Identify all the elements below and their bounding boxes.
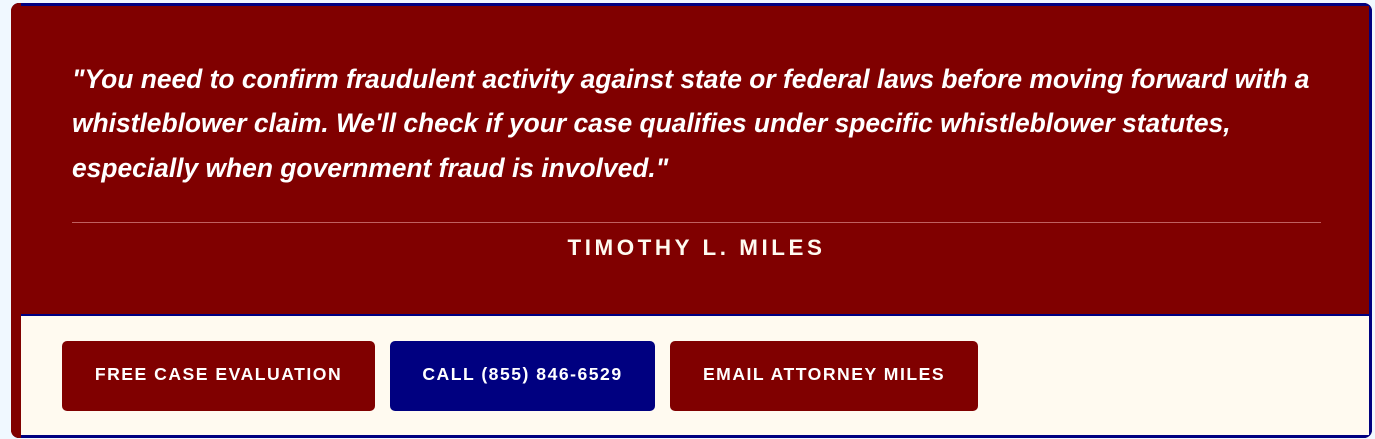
quote text: especially when government fraud is involved." [72,153,668,183]
button: email [670,341,978,411]
button: free case evaluation [62,341,375,411]
quote text: "You need to confirm fraudulent activity against state or federal laws before moving forward with a [72,64,1309,94]
quote text: whistleblower claim. We'll check if your case qualifies under specific whistleblower statutes, [72,108,1231,138]
button: email: EMAIL ATTORNEY MILES [703,364,945,384]
button: call [390,341,655,411]
quote text [72,64,1309,183]
attribution: TIMOTHY L. MILES [567,235,826,260]
button: free case evaluation: FREE CASE EVALUATION [95,364,342,384]
button: call: CALL (855) 846-6529 [422,364,623,384]
